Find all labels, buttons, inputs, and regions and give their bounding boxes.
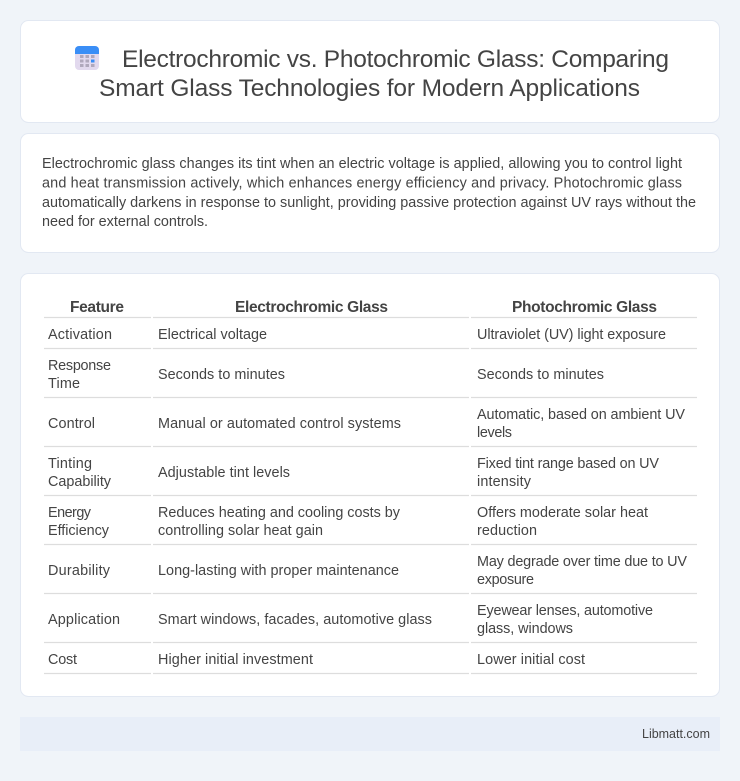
panel: introduction (20, 134, 720, 252)
table header: Photochromic Glass (512, 299, 657, 316)
row: tinting capability (48, 456, 659, 490)
row: response time: Seconds to minutes (158, 367, 285, 383)
table header: Feature (70, 299, 124, 316)
row: tinting capability: Adjustable tint levels (158, 465, 290, 481)
row: energy efficiency: controlling solar heat gain (158, 523, 323, 539)
text block: introduction (42, 156, 696, 230)
row: cost: Lower initial cost (477, 652, 585, 668)
row: cost: Higher initial investment (158, 652, 313, 668)
row: control: Manual or automated control systems (158, 416, 401, 432)
table row lines (44, 318, 697, 674)
panel: comparison table (20, 274, 720, 696)
row: durability: Long-lasting with proper maintenance (158, 563, 399, 579)
text block: introduction: need for external controls. (42, 214, 208, 230)
row: application: Application (48, 612, 120, 628)
row: energy efficiency: Offers moderate solar heat (477, 505, 648, 521)
row: energy efficiency: reduction (477, 523, 537, 539)
row: activation (48, 327, 666, 343)
row: response time (48, 358, 604, 392)
row: cost: Cost (48, 652, 77, 668)
row: durability: Durability (48, 563, 111, 579)
text block: introduction: Electrochromic glass changes its tint when an electric voltage is applied, allowing you to control light (42, 156, 682, 172)
row: tinting capability: Capability (48, 474, 112, 490)
icon: calendar (75, 46, 99, 70)
row: tinting capability: Fixed tint range based on UV (477, 456, 659, 472)
footer (20, 717, 720, 751)
title: Electrochromic vs. Photochromic Glass: Comparing (122, 46, 669, 73)
row: control: levels (477, 425, 512, 441)
row: cost (48, 652, 585, 668)
row: energy efficiency: Energy (48, 505, 92, 521)
text block: introduction: and heat transmission actively, which enhances energy efficiency and privacy. Photochromic glass (42, 176, 682, 192)
row: durability (48, 554, 687, 588)
row: response time: Response (48, 358, 111, 374)
panel: title card (20, 20, 720, 122)
row: application: glass, windows (477, 621, 573, 637)
row: response time: Seconds to minutes (477, 367, 604, 383)
row: energy efficiency: Efficiency (48, 523, 110, 539)
row: activation: Activation (48, 327, 112, 343)
title: Smart Glass Technologies for Modern Applications (99, 75, 640, 102)
footer: Libmatt.com (642, 727, 710, 741)
row: response time: Time (48, 376, 80, 392)
row: durability: May degrade over time due to UV (477, 554, 687, 570)
row: durability: exposure (477, 572, 534, 588)
table header: Electrochromic Glass (235, 299, 388, 316)
row: application: Eyewear lenses, automotive (477, 603, 653, 619)
row: energy efficiency: Reduces heating and cooling costs by (158, 505, 401, 521)
row: application (48, 603, 653, 637)
row: control (48, 407, 685, 441)
text block: introduction: automatically darkens in response to sunlight, providing passive protection against UV rays without the (42, 195, 696, 211)
row: control: Automatic, based on ambient UV (477, 407, 685, 423)
title (99, 46, 669, 102)
row: energy efficiency (48, 505, 648, 539)
row: activation: Ultraviolet (UV) light exposure (477, 327, 666, 343)
row: tinting capability: intensity (477, 474, 532, 490)
row: application: Smart windows, facades, automotive glass (158, 612, 432, 628)
table header (70, 299, 657, 316)
row: activation: Electrical voltage (158, 327, 267, 343)
row: control: Control (48, 416, 95, 432)
row: tinting capability: Tinting (48, 456, 92, 472)
